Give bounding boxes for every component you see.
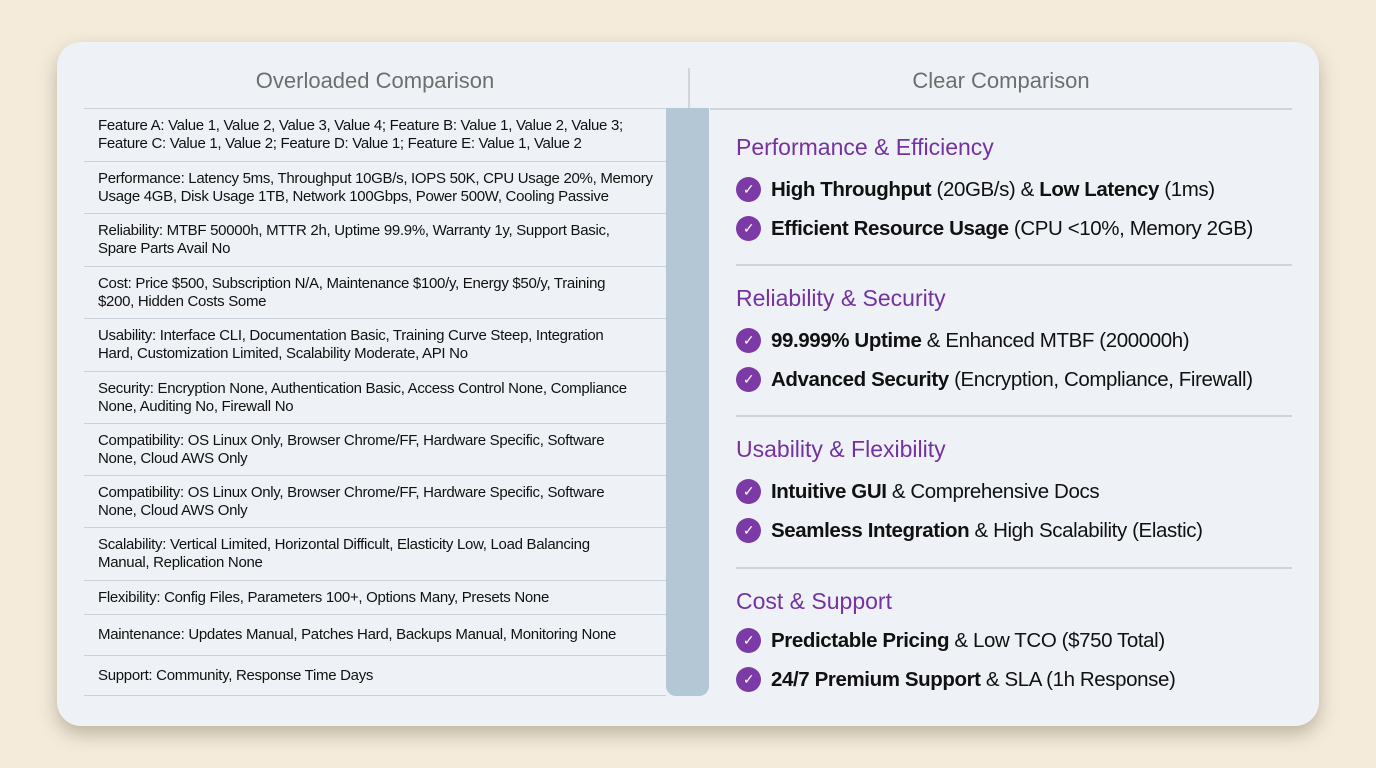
item: ✓ — [743, 483, 754, 499]
item: Efficient Resource Usage — [771, 216, 1009, 240]
table: overloaded rows: Maintenance: Updates Manual, Patches Hard, Backups Manual, Monitoring None — [98, 626, 616, 643]
item: Intuitive GUI — [771, 480, 887, 502]
item: ✓ — [743, 181, 754, 197]
table: overloaded rows: Usability: Interface CLI, Documentation Basic, Training Curve Steep, Integration — [98, 327, 603, 344]
item: ✓ — [743, 632, 754, 648]
item — [736, 667, 1175, 692]
section: cost: Cost & Support — [736, 588, 892, 614]
item — [736, 479, 1099, 504]
item: & Enhanced MTBF (200000h) — [927, 328, 1189, 352]
section: usability: Usability & Flexibility — [736, 436, 946, 462]
table: overloaded rows: None, Cloud AWS Only — [98, 502, 247, 518]
item — [736, 328, 1189, 353]
item: ✓ — [743, 522, 754, 538]
table: overloaded rows — [84, 108, 666, 696]
table: overloaded rows: Hard, Customization Limited, Scalability Moderate, API No — [98, 345, 468, 362]
item: ✓ — [743, 332, 754, 348]
item: & SLA (1h Response) — [986, 668, 1175, 690]
item — [736, 367, 1253, 392]
heading: overloaded: Overloaded Comparison — [256, 68, 494, 93]
item: ✓ — [743, 220, 754, 236]
table: overloaded rows: Security: Encryption None, Authentication Basic, Access Control None, Compliance — [98, 380, 627, 396]
table: overloaded rows: Compatibility: OS Linux Only, Browser Chrome/FF, Hardware Specific, Software — [98, 484, 604, 500]
table: overloaded rows: Manual, Replication None — [98, 554, 263, 571]
item: ✓ — [743, 671, 754, 687]
table: overloaded rows: Performance: Latency 5ms, Throughput 10GB/s, IOPS 50K, CPU Usage 20%, Memory — [98, 170, 653, 186]
item: (20GB/s) & (1ms) — [937, 178, 1215, 200]
item: & Comprehensive Docs — [892, 480, 1099, 502]
clear comparison content — [736, 134, 1292, 692]
table: overloaded rows: Feature A: Value 1, Value 2, Value 3, Value 4; Feature B: Value 1, Value 2, Value 3; — [98, 117, 623, 134]
item: (CPU <10%, Memory 2GB) — [1014, 216, 1253, 240]
table: overloaded rows: Flexibility: Config Files, Parameters 100+, Options Many, Presets None — [98, 588, 549, 606]
item: Predictable Pricing — [771, 628, 949, 652]
table: overloaded rows: Spare Parts Avail No — [98, 240, 230, 257]
item: & Low TCO ($750 Total) — [954, 628, 1165, 652]
table: overloaded rows: Usage 4GB, Disk Usage 1TB, Network 100Gbps, Power 500W, Cooling Passive — [98, 188, 609, 204]
item: 24/7 Premium Support — [771, 668, 981, 690]
section: performance: Performance & Efficiency — [736, 134, 994, 160]
item — [736, 518, 1203, 543]
table: overloaded rows: Reliability: MTBF 50000h, MTTR 2h, Uptime 99.9%, Warranty 1y, Support Basic, — [98, 222, 610, 239]
table: overloaded rows: Cost: Price $500, Subscription N/A, Maintenance $100/y, Energy $50/y, Training — [98, 274, 605, 292]
item — [736, 216, 1253, 241]
heading: clear: Clear Comparison — [912, 68, 1090, 93]
item: 99.999% Uptime — [771, 328, 922, 352]
item: Low Latency — [1039, 178, 1159, 200]
item: ✓ — [743, 371, 754, 387]
table: overloaded rows: Feature C: Value 1, Value 2; Feature D: Value 1; Feature E: Value 1, Value 2 — [98, 135, 582, 152]
table: overloaded rows: Scalability: Vertical Limited, Horizontal Difficult, Elasticity Low, Load Balancing — [98, 536, 590, 553]
item: (Encryption, Compliance, Firewall) — [954, 368, 1253, 390]
section: reliability: Reliability & Security — [736, 285, 946, 311]
table: overloaded rows: None, Auditing No, Firewall No — [98, 398, 293, 414]
item: Advanced Security — [771, 368, 949, 390]
item — [736, 177, 1215, 202]
item: High Throughput — [771, 178, 931, 200]
table: overloaded rows: Compatibility: OS Linux Only, Browser Chrome/FF, Hardware Specific, Software — [98, 432, 604, 448]
item: & High Scalability (Elastic) — [974, 518, 1203, 542]
item: Seamless Integration — [771, 518, 969, 542]
table: overloaded rows: None, Cloud AWS Only — [98, 450, 247, 466]
blue separator bar — [666, 108, 709, 696]
item — [736, 628, 1165, 653]
table: overloaded rows: $200, Hidden Costs Some — [98, 292, 266, 310]
table: overloaded rows: Support: Community, Response Time Days — [98, 666, 373, 684]
